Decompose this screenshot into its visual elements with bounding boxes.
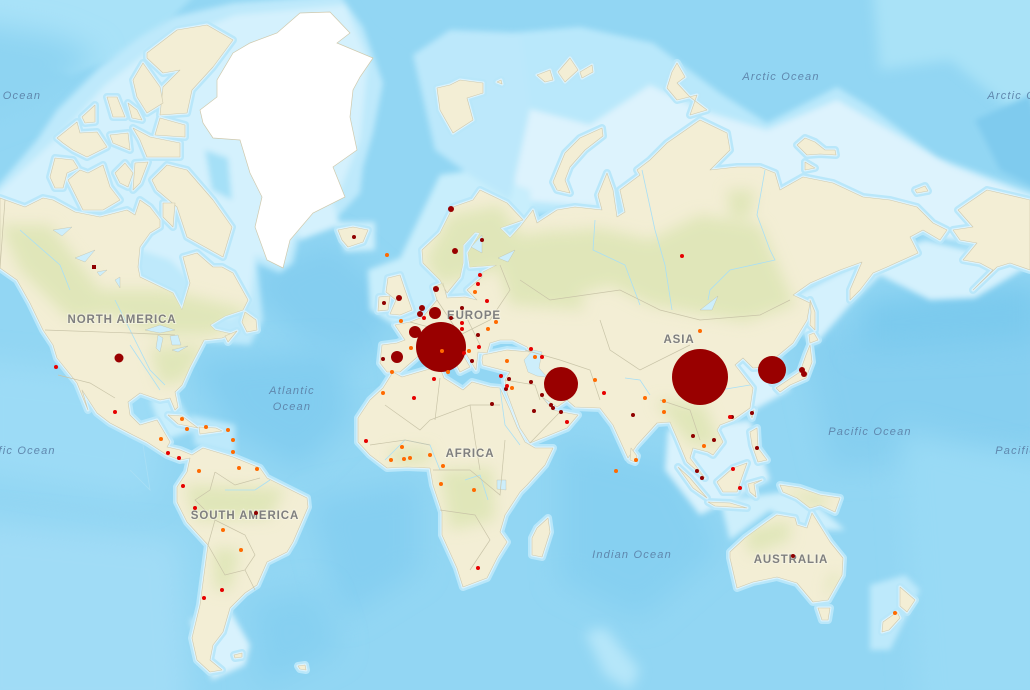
continent labels: NORTH AMERICA	[67, 314, 177, 326]
lakes and rivers	[0, 170, 790, 590]
continent labels: AFRICA	[446, 448, 494, 460]
ocean labels: Indian Ocean	[592, 549, 672, 561]
orange markers	[159, 253, 897, 615]
ocean labels: Pacific Ocean	[828, 426, 912, 438]
Greenland	[200, 12, 373, 268]
red markers	[54, 254, 742, 600]
continent labels	[67, 310, 828, 566]
continent labels: SOUTH AMERICA	[191, 510, 299, 522]
continent labels: AUSTRALIA	[754, 554, 828, 566]
continent labels: EUROPE	[447, 310, 501, 322]
ocean labels: Arctic Ocean	[741, 71, 820, 83]
small dark markers	[92, 235, 795, 558]
country borders	[0, 200, 790, 590]
ocean labels: Ocean	[273, 401, 311, 413]
continent labels: ASIA	[663, 334, 695, 346]
ocean labels: Atlantic	[268, 385, 315, 397]
ocean labels	[0, 71, 1030, 561]
ocean labels: Ocean	[3, 90, 41, 102]
vegetation shading	[0, 190, 842, 600]
large bubbles	[114, 206, 807, 405]
